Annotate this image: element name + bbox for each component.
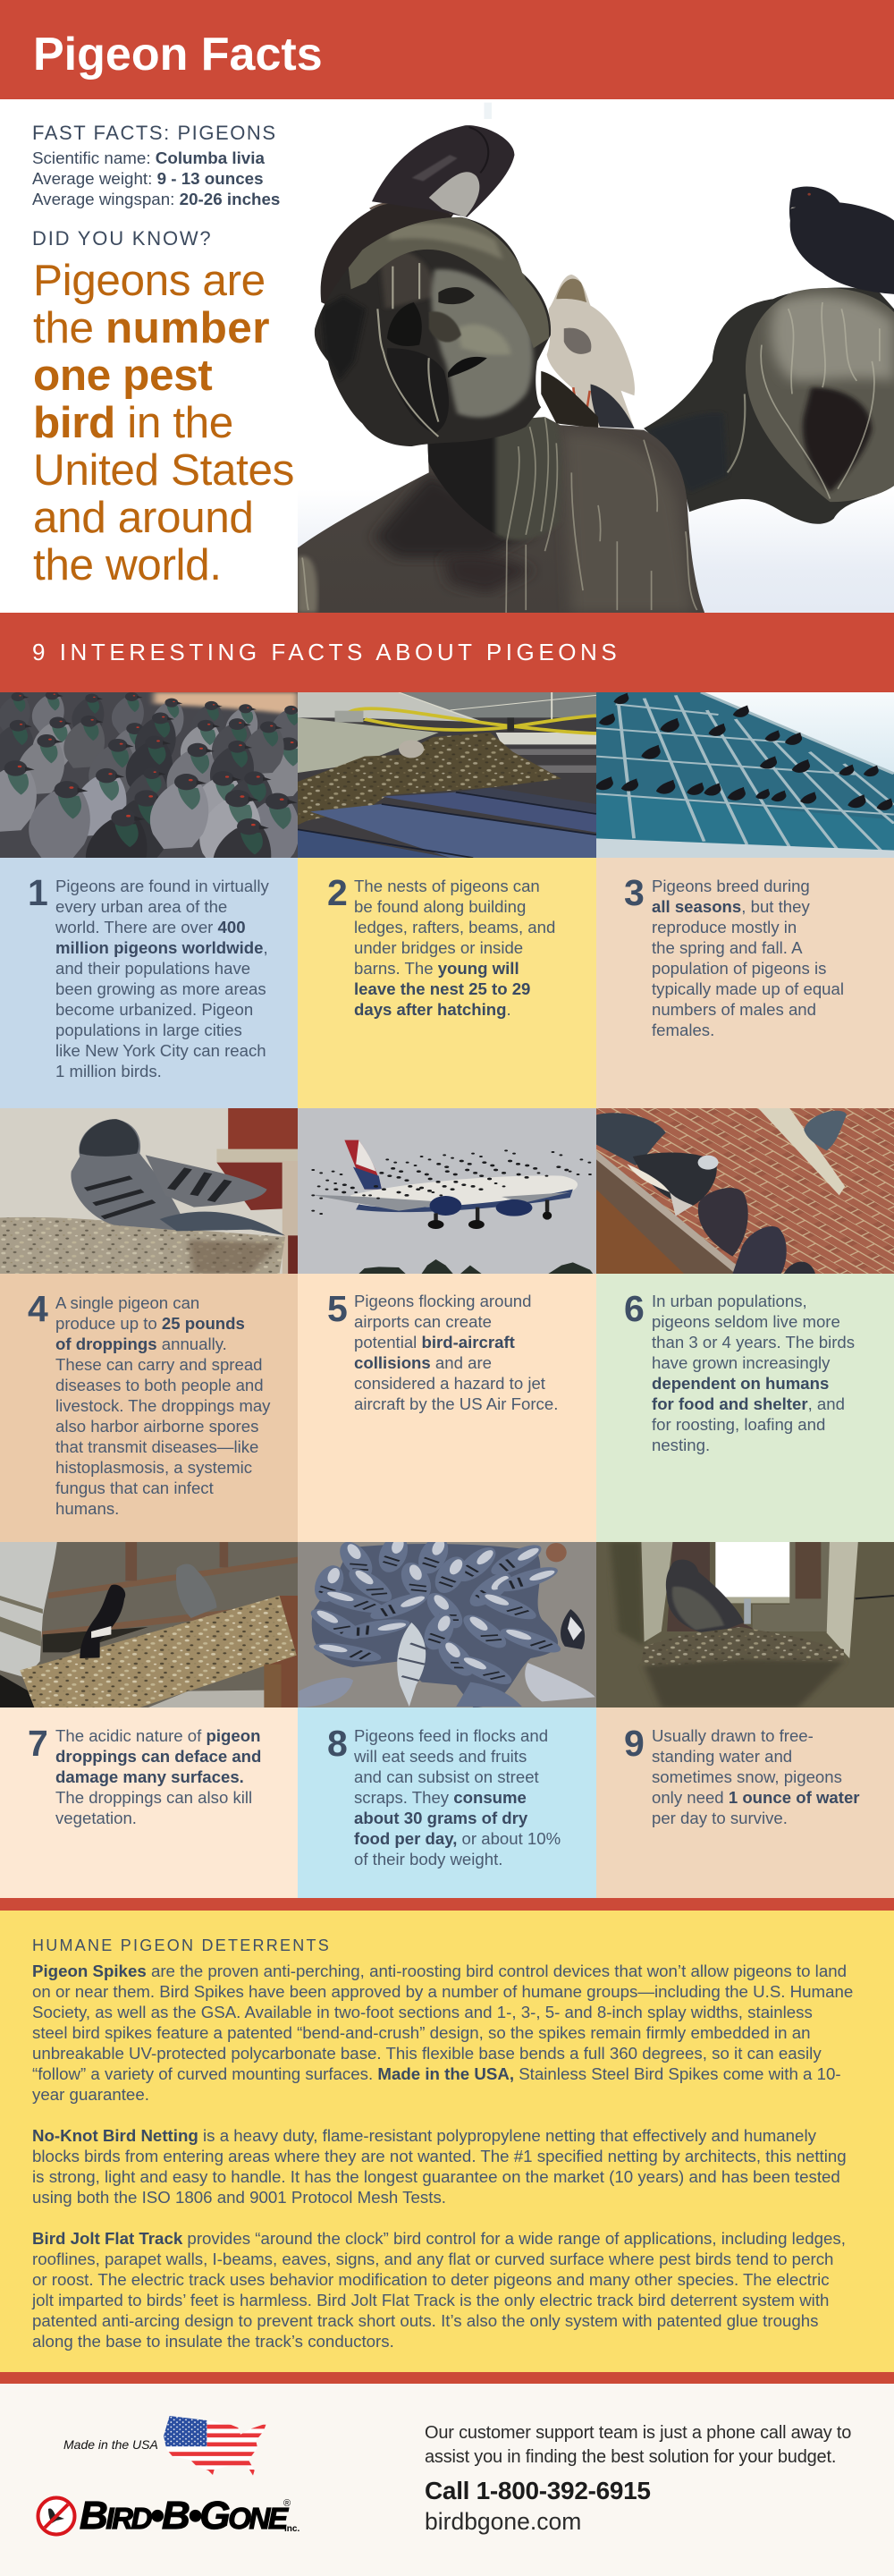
fact text 5: aircraft by the US Air Force. [354,1394,558,1413]
fact text 2: barns. The young will [354,959,519,978]
callout: number one pest bird: one pest [33,351,212,400]
paragraph: flat track: rooflines, parapet walls, I-beams, eaves, signs, and any flat or curved surface where pest birds tend to perch [32,2250,833,2268]
fact text 8: will eat seeds and fruits [354,1747,527,1766]
fact text 2: leave the nest 25 to 29 [354,979,530,998]
title: Pigeon Facts [33,29,323,80]
fact text 1: Pigeons are found in virtually [55,877,269,895]
hero photo: statue with pigeons [298,102,894,613]
fact card 2 [298,692,596,1108]
photo: pigeon on a soiled ledge [0,1108,298,1274]
paragraph: flat track [32,2229,846,2351]
fact text 8: of their body weight. [354,1850,502,1868]
fact text 4: histoplasmosis, a systemic [55,1458,252,1477]
fact text 7: The droppings can also kill [55,1788,252,1807]
fact text 8: food per day, or about 10% [354,1829,561,1848]
fact text 4: of droppings annually. [55,1335,227,1353]
fact text 8: and can subsist on street [354,1767,539,1786]
helmet behind head [321,201,453,309]
callout: number one pest bird: and around [33,493,253,542]
paragraph: pigeon spikes: Pigeon Spikes are the proven anti-perching, anti-roosting bird control devices that won’t allow pigeons to land [32,1962,847,1980]
fact text 3: numbers of males and [652,1000,816,1019]
fact text 8: Pigeons feed in flocks and [354,1726,548,1745]
photo: glass roof with pigeons [596,692,894,858]
paragraph: flat track: or roost. The electric track uses behavior modification to deter pigeons and many other species. The electric [32,2270,830,2289]
right pigeon [789,186,894,294]
section heading: 9 INTERESTING FACTS ABOUT PIGEONS [32,639,620,665]
callout: number one pest bird [33,256,294,589]
callout: number one pest bird: United States [33,445,294,495]
callout: number one pest bird: the world. [33,540,222,589]
fact text 4: produce up to 25 pounds [55,1314,245,1333]
fact text 7: vegetation. [55,1809,137,1827]
middle pigeon [547,275,635,428]
fact text 5: considered a hazard to jet [354,1374,545,1393]
number 1: 1 [28,872,48,913]
fact text 2: under bridges or inside [354,938,523,957]
number 5: 5 [327,1288,348,1329]
fact text 9: only need 1 ounce of water [652,1788,860,1807]
fact text 1: million pigeons worldwide, [55,938,268,957]
fact text 4: livestock. The droppings may [55,1396,270,1415]
fact text 1: 1 million birds. [55,1062,162,1080]
head [315,216,551,446]
fact text 2: The nests of pigeons can [354,877,540,895]
paragraph: pigeon spikes: unbreakable UV-protected polycarbonate base. This flexible base bends a full 360 degrees, so it can easily [32,2044,822,2063]
fact text 1 [55,877,269,1080]
fact text 7: The acidic nature of pigeon [55,1726,260,1745]
fact text 9: standing water and [652,1747,792,1766]
photo: droppings on a board [0,1542,298,1707]
heading: did you know: DID YOU KNOW? [32,227,212,250]
fact text 9 [652,1726,860,1827]
fact text 5: collisions and are [354,1353,492,1372]
photo: pigeons on a brick ledge [596,1108,894,1274]
fact text 4: fungus that can infect [55,1479,214,1497]
fact text 4: diseases to both people and [55,1376,264,1394]
fact card 4 [0,1108,298,1542]
fact text 3: typically made up of equal [652,979,844,998]
fact lines: Average weight: 9 - 13 ounces [32,169,264,188]
divider band [0,1898,894,1911]
photo: nest on a windowsill [596,1542,894,1707]
fact text 3: population of pigeons is [652,959,826,978]
paragraph: pigeon spikes: “follow” a variety of curved mounting surfaces. Made in the USA, Stainless Steel Bird Spikes come with a 10- [32,2064,841,2083]
registered mark: ® [283,2498,291,2509]
number 8: 8 [327,1723,348,1764]
paragraph: pigeon spikes [32,1962,853,2104]
fact card 6 [596,1108,894,1542]
paragraph: pigeon spikes: Society, as well as the GSA. Available in two-foot sections and 1-, 3-, 5- and 8-inch splay widths, stainless [32,2003,813,2021]
fact text 7: droppings can deface and [55,1747,261,1766]
fact text 9: per day to survive. [652,1809,788,1827]
header band: title [0,0,894,99]
number 2: 2 [327,872,348,913]
arm and orb [644,288,894,524]
fact text 6: than 3 or 4 years. The birds [652,1333,855,1352]
fact text 5 [354,1292,558,1413]
contact text [425,2423,851,2535]
fact text 6: have grown increasingly [652,1353,830,1372]
fact card 5 [298,1108,596,1542]
paragraph: bird netting: is strong, light and easy to handle. It has the longest guarantee on the market (10 years) and has been tested [32,2167,840,2186]
fact text 1: and their populations have [55,959,250,978]
inc mark: Inc. [284,2524,299,2534]
fact text 8 [354,1726,561,1868]
icon: no-bird symbol [36,2496,77,2537]
made in the usa text: Made in the USA [63,2437,158,2452]
fact text 6: nesting. [652,1436,710,1454]
fact text 4 [55,1293,270,1518]
fact text 2: days after hatching. [354,1000,511,1019]
icon: usa flag map [164,2416,266,2476]
footer panel [0,2384,894,2576]
fact text 9: Usually drawn to free- [652,1726,814,1745]
fact card 1 [0,692,298,1108]
wordmark: BIRD•B•GONE [80,2494,286,2538]
paragraph: flat track: jolt imparted to birds’ feet is harmless. Bird Jolt Flat Track is the only electric track bird deterrent system with [32,2291,829,2309]
paragraph: bird netting: blocks birds from entering areas where they are not wanted. The #1 specified netting by architects, this netting [32,2147,847,2165]
paragraph: bird netting [32,2126,847,2207]
paragraph: flat track: along the base to insulate the track’s conductors. [32,2332,394,2351]
heading: deterrents: HUMANE PIGEON DETERRENTS [32,1936,331,1954]
callout: number one pest bird: the number [33,303,270,352]
support text: Our customer support team is just a phone call away to [425,2423,851,2443]
support text: assist you in finding the best solution for your budget. [425,2447,836,2467]
fact text 1: like New York City can reach [55,1041,266,1060]
fact text 2: be found along building [354,897,526,916]
fact text 3: the spring and fall. A [652,938,803,957]
fact text 4: These can carry and spread [55,1355,263,1374]
fact text 7: damage many surfaces. [55,1767,244,1786]
phone number: Call 1-800-392-6915 [425,2477,651,2504]
section heading band: 9 interesting facts [0,613,894,692]
fact text 6 [652,1292,855,1454]
photo: airliner and flock [298,1108,596,1274]
support text [425,2423,851,2467]
paragraph: bird netting: No-Knot Bird Netting is a heavy duty, flame-resistant polypropylene netting that effectively and humanely [32,2126,816,2145]
fact text 4: that transmit diseases—like [55,1437,258,1456]
torso [298,417,704,613]
paragraph: flat track: Bird Jolt Flat Track provides “around the clock” bird control for a wide range of applications, including ledges, [32,2229,846,2248]
fact card 3 [596,692,894,1108]
heading: fast facts: FAST FACTS: PIGEONS [32,122,277,144]
number 4: 4 [28,1288,48,1329]
fact text 6: dependent on humans [652,1374,829,1393]
fact text 5: potential bird-aircraft [354,1333,515,1352]
paragraph: flat track: patented anti-arcing design to prevent track short outs. It’s also the only system with patented glue troughs [32,2311,819,2330]
number 6: 6 [624,1288,645,1329]
fact lines [32,148,280,208]
fact text 3: reproduce mostly in [652,918,797,936]
paragraph: pigeon spikes: on or near them. Bird Spikes have been approved by a number of humane groups—including the U.S. Humane [32,1982,853,2001]
fact card 8 [298,1542,596,1898]
fact card 9 [596,1542,894,1898]
logo: bird b gone [36,2494,299,2538]
number 7: 7 [28,1723,48,1764]
callout: number one pest bird: Pigeons are [33,256,266,305]
panel: humane pigeon deterrents [0,1911,894,2372]
fact text 1: world. There are over 400 [55,918,246,936]
number 3: 3 [624,872,645,913]
website: birdbgone.com [425,2508,581,2535]
fact text 3: Pigeons breed during [652,877,810,895]
fact lines: Average wingspan: 20-26 inches [32,190,280,208]
fact text 1: been growing as more areas [55,979,266,998]
callout: number one pest bird: bird in the [33,398,233,447]
fact text 7 [55,1726,261,1827]
fact lines: Scientific name: Columba livia [32,148,265,167]
fact text 8: about 30 grams of dry [354,1809,527,1827]
fact text 4: also harbor airborne spores [55,1417,258,1436]
fact text 6: In urban populations, [652,1292,807,1310]
divider band [0,2372,894,2384]
fact text 3 [652,877,844,1039]
fact text 9: sometimes snow, pigeons [652,1767,842,1786]
fact text 6: for roosting, loafing and [652,1415,825,1434]
fact text 1: become urbanized. Pigeon [55,1000,253,1019]
paragraph: pigeon spikes: year guarantee. [32,2085,149,2104]
photo: crowd of pigeons [0,692,298,858]
fact text 1: populations in large cities [55,1021,242,1039]
fact text 2 [354,877,555,1019]
photo: nest under a roof [298,692,596,858]
fact text 6: for food and shelter, and [652,1394,845,1413]
top pigeon [372,125,514,217]
paragraph: bird netting: using both the ISO 1806 and 9001 Protocol Mesh Tests. [32,2188,446,2207]
fact text 2: ledges, rafters, beams, and [354,918,555,936]
fact text 4: humans. [55,1499,119,1518]
fact text 8: scraps. They consume [354,1788,527,1807]
text block: fast facts [32,122,280,208]
fact text 5: airports can create [354,1312,492,1331]
number 9: 9 [624,1723,645,1764]
photo: flock feeding on pavement [298,1542,596,1707]
fact text 3: females. [652,1021,714,1039]
fact text 5: Pigeons flocking around [354,1292,531,1310]
fact card 7 [0,1542,298,1898]
fact text 3: all seasons, but they [652,897,810,916]
fact text 6: pigeons seldom live more [652,1312,840,1331]
fact text 4: A single pigeon can [55,1293,199,1312]
paragraph: pigeon spikes: steel bird spikes feature a patented “bend-and-crush” design, so the spikes remain firmly embedded in an [32,2023,810,2042]
fact text 1: every urban area of the [55,897,227,916]
